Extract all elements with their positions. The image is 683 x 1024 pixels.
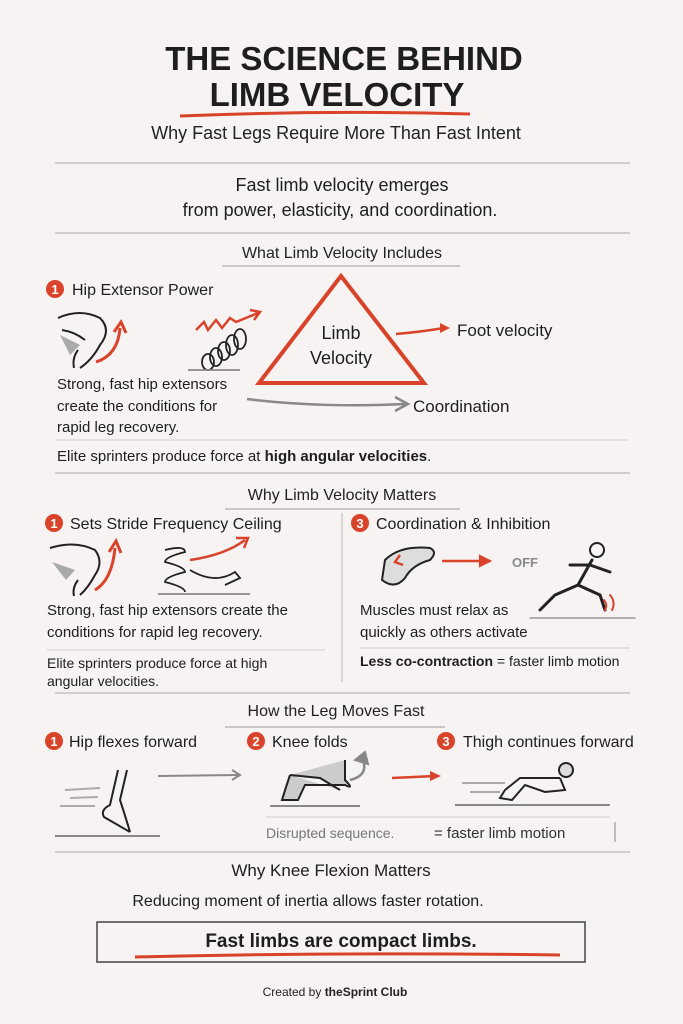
panel: stride frequency ceiling: angular velocities. (47, 673, 159, 689)
note: disrupted sequence: Disrupted sequence. (266, 825, 394, 841)
panel: stride frequency ceiling: Strong, fast hip extensors create the (47, 602, 288, 619)
callout: compact limbs (97, 922, 585, 962)
arrow: coordination: Coordination (413, 397, 509, 416)
heading: why limb velocity matters: Why Limb Velocity Matters (248, 487, 436, 504)
panel: coordination and inhibition (351, 514, 635, 669)
step 3: thigh continues: 3 (442, 734, 450, 749)
arrow: coordination (247, 397, 509, 416)
step 2: knee folds: 2 (252, 734, 260, 749)
panel: coordination and inhibition: quickly as others activate (360, 624, 528, 641)
panel: stride frequency ceiling: 1 (50, 516, 58, 531)
intro statement: Fast limb velocity emerges (235, 175, 449, 195)
heading: why knee flexion matters: Why Knee Flexion Matters (231, 861, 431, 880)
callout: compact limbs: Fast limbs are compact limbs. (205, 931, 477, 952)
arrow: foot velocity (396, 321, 553, 340)
arrow: step 2 to 3 (392, 771, 441, 781)
panel: stride frequency ceiling: conditions for rapid leg recovery. (47, 624, 263, 641)
step 2: knee folds: Knee folds (272, 734, 348, 751)
badge 1: 1 (51, 282, 59, 297)
credit: Created by theSprint Club (263, 985, 407, 999)
panel: coordination and inhibition: OFF (512, 555, 538, 570)
text: hip extensors: rapid leg recovery. (57, 419, 179, 436)
panel: coordination and inhibition: Muscles must relax as (360, 602, 508, 619)
icon: spring muscle (188, 310, 260, 370)
title: LIMB VELOCITY (210, 76, 464, 113)
step 3: thigh continues: Thigh continues forward (463, 734, 634, 751)
panel: coordination and inhibition: Coordination & Inhibition (376, 516, 550, 533)
text: hip extensors (57, 376, 227, 436)
step 1: hip flexes: Hip flexes forward (69, 734, 197, 751)
panel: coordination and inhibition: Less co-contraction = faster limb motion (360, 653, 619, 669)
text: hip extensors: create the conditions for (57, 398, 217, 415)
step 3: thigh continues (437, 732, 634, 805)
panel: stride frequency ceiling: Sets Stride Frequency Ceiling (70, 516, 282, 533)
badge 1 (46, 280, 64, 298)
heading: what limb velocity includes: What Limb Velocity Includes (242, 245, 442, 262)
icon: sprinter (530, 543, 635, 618)
icon: spring (158, 538, 250, 594)
arrow: foot velocity: Foot velocity (457, 321, 553, 340)
intro statement: from power, elasticity, and coordination. (183, 200, 497, 220)
icon: hip joint (58, 313, 126, 368)
step 2: knee folds (247, 732, 368, 806)
title (165, 40, 523, 116)
triangle: limb velocity: Velocity (310, 348, 372, 368)
panel: hip extensor power (46, 280, 260, 436)
step 1: hip flexes (45, 732, 197, 836)
panel: coordination and inhibition: 3 (356, 516, 364, 531)
triangle: limb velocity (259, 276, 424, 383)
triangle: limb velocity: Limb (321, 323, 361, 343)
intro statement (183, 175, 497, 220)
note: disrupted sequence (266, 817, 615, 842)
panel: stride frequency ceiling (45, 514, 325, 689)
text: elite sprinters: Elite sprinters produce force at high angular velocities. (57, 448, 431, 465)
heading: how the leg moves fast: How the Leg Moves Fast (248, 703, 425, 720)
icon: muscle off (382, 548, 490, 585)
title: THE SCIENCE BEHIND (165, 40, 523, 77)
text: moment of inertia: Reducing moment of inertia allows faster rotation. (132, 893, 484, 910)
icon: hip joint 2 (50, 541, 121, 596)
panel: stride frequency ceiling: Elite sprinters produce force at high (47, 655, 267, 671)
arrow: step 1 to 2 (158, 770, 240, 780)
note: disrupted sequence: = faster limb motion (434, 825, 565, 842)
subtitle: Why Fast Legs Require More Than Fast Intent (151, 123, 521, 143)
panel: hip extensor power: Hip Extensor Power (72, 282, 214, 299)
step 1: hip flexes: 1 (50, 734, 58, 749)
text: hip extensors: Strong, fast hip extensors (57, 376, 227, 393)
